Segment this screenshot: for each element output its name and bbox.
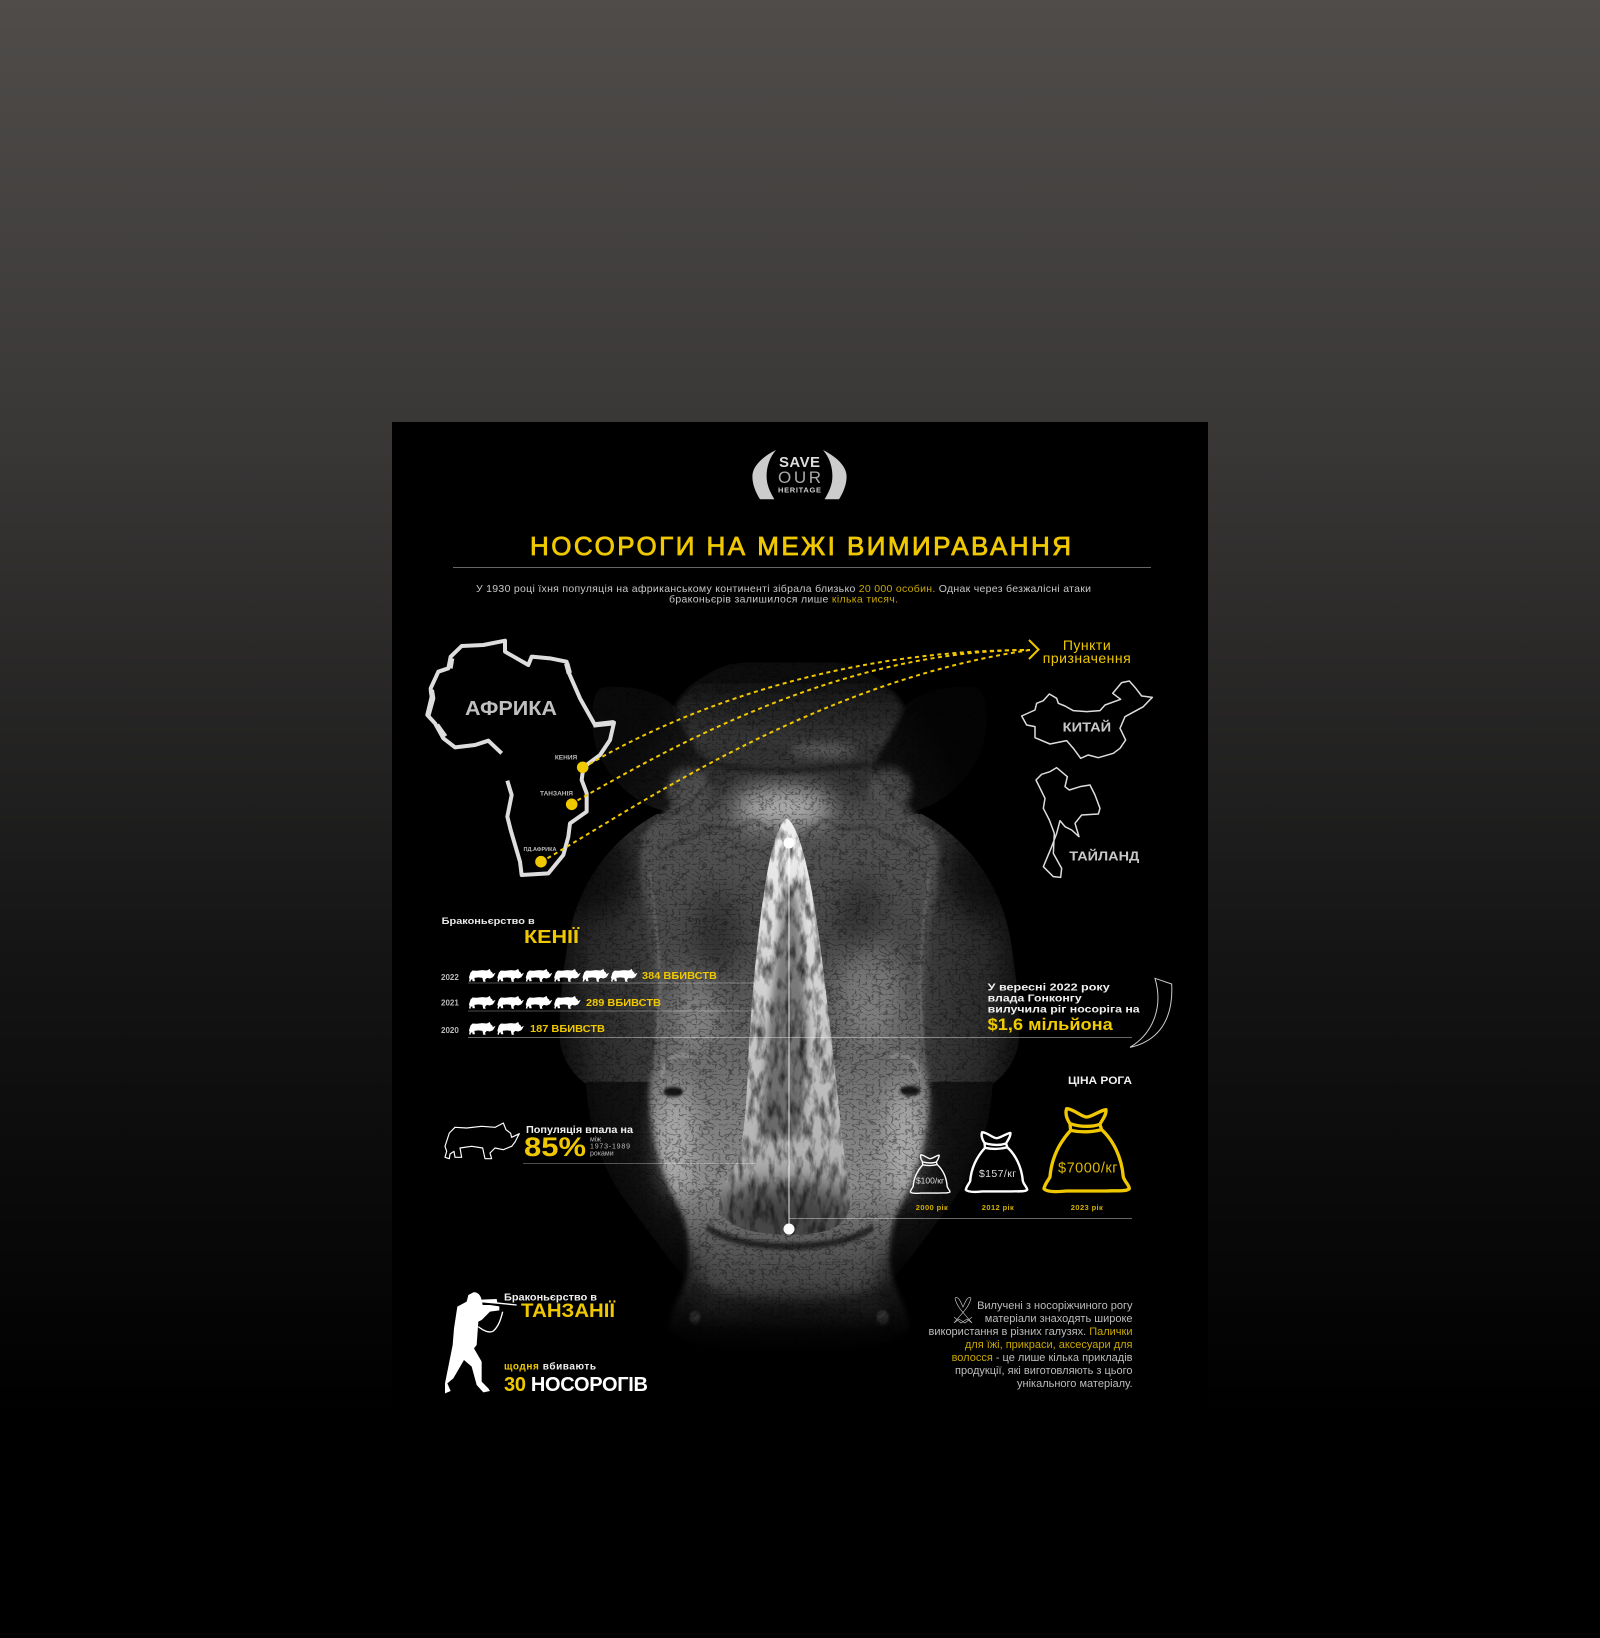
forehead wrinkles	[660, 758, 933, 853]
price chart: money bags	[910, 1109, 1129, 1212]
dashed trade routes	[541, 650, 1030, 862]
stat: population fell 85%	[445, 1123, 756, 1164]
logo	[752, 450, 847, 499]
text block: horn uses: унікального матеріалу.	[1017, 1378, 1132, 1390]
text block: horn uses: продукції, які виготовляють з цього	[955, 1365, 1132, 1377]
map: Africa: АФРИКА	[465, 698, 557, 720]
horn	[717, 818, 850, 1235]
heading: horn price: ЦІНА РОГА	[1068, 1075, 1132, 1087]
stat: population fell 85%: роками	[590, 1150, 614, 1158]
destination label: призначення	[1043, 650, 1131, 666]
logo: HERITAGE	[778, 486, 821, 494]
location dots	[535, 762, 588, 868]
callout: Hong Kong seizure	[988, 982, 1140, 1034]
text block: horn uses: матеріали знаходять широке	[985, 1313, 1132, 1325]
logo: OUR	[778, 468, 821, 487]
text: poaching in Tanzania: ТАНЗАНІЇ	[521, 1301, 616, 1322]
text block: horn uses: Вилучені з носоріжчиного рогу	[977, 1300, 1133, 1312]
icon: horn outline	[1130, 978, 1172, 1047]
callout: Hong Kong seizure: вилучила ріг носоріга на	[988, 1004, 1140, 1016]
icon: ribbon	[954, 1297, 972, 1323]
text block: horn uses: волосся - це лише кілька прикладів	[952, 1352, 1133, 1364]
pictogram chart: Kenya kills by year: 2021	[441, 998, 459, 1008]
callout: Hong Kong seizure: $1,6 мільйона	[988, 1016, 1114, 1034]
country labels: ТАНЗАНІЯ	[540, 790, 573, 798]
heading: poaching in Kenya	[442, 916, 580, 947]
bag 2012: 2012 рік	[982, 1203, 1014, 1212]
logo: SAVE	[779, 454, 820, 471]
poster panel	[392, 422, 1208, 1638]
heading: poaching in Kenya: Браконьєрство в	[442, 916, 535, 927]
arrow: destination	[1029, 640, 1038, 659]
map: Thailand	[1036, 768, 1140, 877]
pictogram chart: Kenya kills by year: 384 ВБИВСТВ	[642, 971, 717, 982]
text block: horn uses: для їжі, прикраси, аксесуари для	[965, 1339, 1133, 1351]
map: China: КИТАЙ	[1063, 720, 1111, 735]
callout: Hong Kong seizure: влада Гонконгу	[988, 992, 1082, 1004]
title: НОСОРОГИ НА МЕЖІ ВИМИРАВАННЯ	[530, 531, 1071, 561]
bag 2023	[1044, 1109, 1129, 1212]
stat: population fell 85%: Популяція впала на	[526, 1125, 633, 1136]
map: China	[1022, 681, 1152, 758]
text: poaching in Tanzania: щодня вбивають	[504, 1360, 596, 1372]
intro text: браконьєрів залишилося лише кілька тисяч.	[669, 594, 898, 606]
intro text	[476, 583, 1091, 606]
text block: horn uses: використання в різних галузях. Палички	[929, 1326, 1132, 1338]
pictogram chart: Kenya kills by year: 289 ВБИВСТВ	[586, 998, 661, 1009]
country labels: КЕНИЯ	[555, 754, 577, 762]
bag 2023: $7000/кг	[1058, 1160, 1118, 1176]
heading: poaching in Kenya: КЕНІЇ	[524, 927, 580, 947]
text: poaching in Tanzania: 30 НОСОРОГІВ	[504, 1374, 648, 1396]
stat: population fell 85%: між	[590, 1136, 601, 1144]
pictogram chart: Kenya kills by year: 2020	[441, 1026, 459, 1035]
bag 2023: 2023 рік	[1071, 1203, 1103, 1212]
intro text: У 1930 році їхня популяція на африканському континенті зібрала близько 20 000 особин. Однак через безжалісні атаки	[476, 583, 1091, 595]
map: Thailand: ТАЙЛАНД	[1069, 849, 1140, 864]
bag 2000	[910, 1155, 950, 1212]
icon: poacher silhouette	[445, 1292, 517, 1393]
bag 2012	[966, 1132, 1027, 1212]
country labels: ПД.АФРИКА	[524, 847, 556, 853]
bottom fade	[540, 1285, 1060, 1370]
bag 2012: $157/кг	[979, 1168, 1016, 1180]
pictogram chart: Kenya kills by year: 2022	[441, 973, 459, 982]
stat: population fell 85%: 85%	[524, 1132, 586, 1162]
destination label	[1043, 637, 1131, 666]
icon: rhino outline	[445, 1123, 519, 1159]
text: poaching in Tanzania	[504, 1292, 648, 1396]
destination label: Пункти	[1063, 637, 1111, 653]
rhino photo illustration	[560, 662, 1019, 1326]
bag 2000: 2000 рік	[916, 1203, 948, 1212]
map: Africa	[427, 641, 614, 875]
text block: horn uses	[929, 1300, 1133, 1390]
pictogram chart: Kenya kills by year	[441, 969, 1132, 1038]
callout: Hong Kong seizure: У вересні 2022 року	[988, 982, 1110, 994]
vertical measure line on horn	[784, 838, 1132, 1234]
pictogram chart: Kenya kills by year: 187 ВБИВСТВ	[530, 1024, 605, 1035]
country labels	[524, 754, 577, 853]
text: poaching in Tanzania: Браконьєрство в	[504, 1292, 597, 1304]
stat: population fell 85%: 1973-1989	[590, 1144, 630, 1150]
bag 2000: $100/кг	[916, 1176, 944, 1186]
